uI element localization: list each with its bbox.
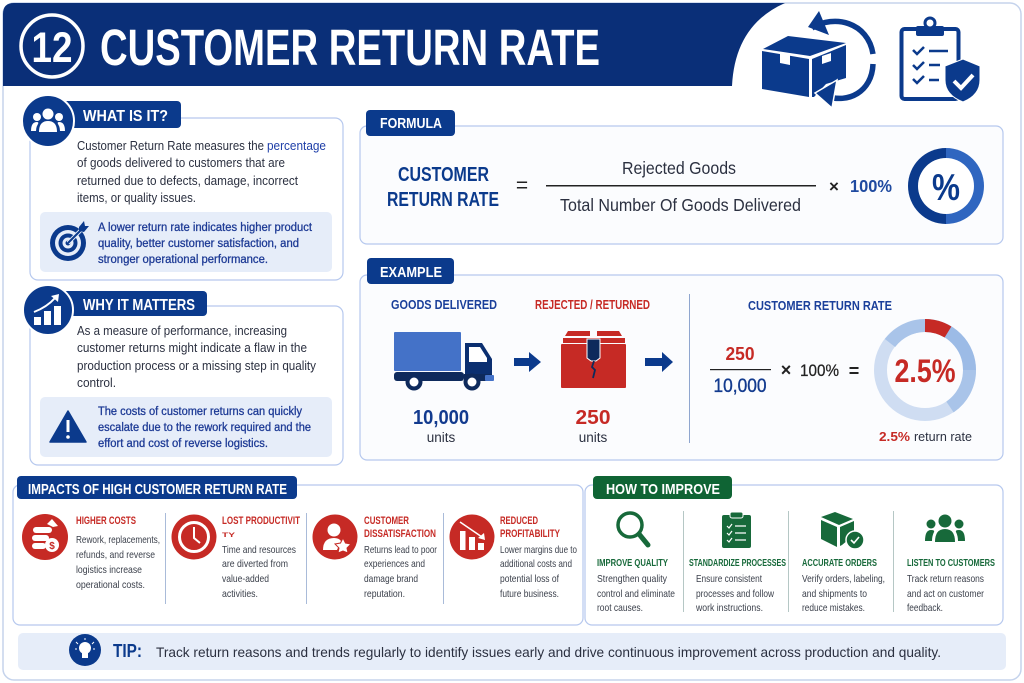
improve: accurate orders: and shipments to [802, 588, 867, 600]
icon: clock [172, 514, 216, 560]
impact: reduced profitability: Lower margins due to [500, 544, 577, 556]
improve: listen to customers: feedback. [907, 602, 943, 614]
impact: customer dissatisfaction: CUSTOMER [364, 515, 409, 527]
panel: formula: × [829, 177, 839, 196]
arrow [514, 352, 541, 372]
rejected returned: 250 [576, 407, 610, 429]
icon: box with check [821, 512, 864, 549]
icon: people [925, 514, 965, 542]
tip bar: Track return reasons and trends regularly to identify issues early and drive continuous improvement across production and quality. [156, 644, 941, 660]
rejected returned: REJECTED / RETURNED [535, 298, 650, 312]
heading: how to improve [593, 476, 732, 499]
title: CUSTOMER RETURN RATE [100, 19, 600, 76]
icon: box with return arrows [762, 11, 873, 108]
impact: customer dissatisfaction: reputation. [364, 588, 405, 600]
icon: warning [50, 411, 86, 442]
impact: higher costs: logistics increase [76, 564, 142, 576]
definition text: of goods delivered to customers that are [77, 155, 285, 170]
number badge [21, 15, 83, 77]
why it matters text [77, 323, 317, 390]
callout: costs of returns: escalate due to the rework required and the [98, 420, 311, 434]
improve: quality: IMPROVE QUALITY [597, 557, 668, 569]
return rate calculation: 10,000 [714, 376, 766, 397]
heading: why it matters [62, 291, 207, 316]
icon: target [50, 221, 89, 261]
formula fraction [546, 158, 816, 215]
panel: why it matters [23, 285, 343, 465]
panel: how to improve [585, 476, 1003, 625]
impact: lost productivity [172, 514, 300, 600]
icon: coins: $ [49, 541, 55, 552]
why it matters text: As a measure of performance, increasing [77, 323, 287, 338]
return rate calculation [710, 299, 892, 397]
improve: listen to customers: Track return reasons [907, 573, 984, 585]
return rate calculation: = [849, 361, 859, 381]
impact: reduced profitability: REDUCED [500, 515, 538, 527]
icon: falling bars [450, 514, 494, 560]
heading: what is it [62, 101, 181, 128]
heading: formula: FORMULA [380, 116, 442, 132]
tip bar [18, 633, 1006, 670]
impact: lost productivity: LOST PRODUCTIVIT [222, 515, 300, 527]
improve: standardize processes: processes and follow [696, 588, 774, 600]
why it matters text: production process or a missing step in quality [77, 358, 317, 373]
panel: example [360, 258, 1003, 460]
impact: higher costs: HIGHER COSTS [76, 515, 136, 527]
panel: impacts [13, 476, 583, 625]
impact: customer dissatisfaction: Returns lead to poor [364, 544, 437, 556]
icon: rising bars [23, 285, 73, 335]
goods delivered [391, 298, 497, 445]
impact: reduced profitability: PROFITABILITY [500, 528, 560, 540]
goods delivered: GOODS DELIVERED [391, 298, 497, 312]
callout: costs of returns: effort and cost of reverse logistics. [98, 436, 268, 450]
impact: lost productivity: activities. [222, 588, 258, 600]
impact: reduced profitability: potential loss of [500, 573, 559, 585]
heading: impacts [17, 476, 297, 499]
callout: costs of returns: The costs of customer returns can quickly [98, 404, 303, 418]
improve: standardize processes: STANDARDIZE PROCESSES [689, 557, 786, 569]
arrow [645, 352, 673, 372]
definition text [77, 138, 326, 205]
callout: lower return rate: A lower return rate indicates higher product [98, 220, 313, 234]
improve: accurate orders: reduce mistakes. [802, 602, 865, 614]
impact: lost productivity: value-added [222, 573, 269, 585]
heading: what is it: WHAT IS IT? [83, 108, 168, 125]
panel: formula: 100% [850, 176, 892, 196]
definition text: returned due to defects, damage, incorrect [77, 173, 298, 188]
impact: reduced profitability: future business. [500, 588, 559, 600]
icon: truck [394, 332, 494, 390]
heading: why it matters: WHY IT MATTERS [83, 297, 195, 314]
icon: magnifier [618, 513, 648, 545]
callout: lower return rate: quality, better customer satisfaction, and [98, 236, 299, 250]
impact: lost productivity: TY [222, 533, 235, 539]
improve: standardize processes: work instructions. [695, 602, 763, 614]
return rate calculation: 250 [726, 344, 754, 364]
donut chart: 2.5% [894, 353, 956, 389]
callout: costs of returns [40, 397, 332, 457]
rejected returned [535, 298, 650, 445]
impact: lost productivity: are diverted from [222, 558, 288, 570]
improve: accurate orders: Verify orders, labeling, [802, 573, 885, 585]
impact: higher costs: refunds, and reverse [76, 549, 155, 561]
improve: quality [597, 513, 675, 614]
icon: person with star [312, 514, 358, 560]
impact: higher costs: operational costs. [76, 579, 145, 591]
heading: impacts: IMPACTS OF HIGH CUSTOMER RETURN RATE [28, 481, 287, 498]
why it matters text: control. [77, 375, 116, 390]
formula label: CUSTOMER [398, 164, 489, 186]
icon: light bulb [69, 634, 101, 666]
donut caption: 2.5% [879, 429, 910, 444]
donut caption: return rate [914, 429, 972, 444]
impact: higher costs: Rework, replacements, [76, 534, 160, 546]
panel: what is it [22, 95, 343, 280]
impact: customer dissatisfaction [312, 514, 437, 600]
icon: people [22, 95, 74, 147]
goods delivered: units [427, 430, 456, 445]
why it matters text: customer returns might indicate a flaw in the [77, 340, 307, 355]
return rate calculation: CUSTOMER RETURN RATE [748, 299, 892, 313]
goods delivered: 10,000 [413, 407, 469, 429]
panel: formula [360, 110, 1003, 244]
formula label: RETURN RATE [387, 189, 499, 211]
definition text: percentage [267, 138, 326, 153]
impact: customer dissatisfaction: damage brand [364, 573, 418, 585]
improve: quality: root causes. [597, 602, 643, 614]
icon: percent ring [908, 148, 984, 224]
return rate calculation: × [781, 360, 791, 380]
number badge: 12 [32, 24, 72, 72]
heading: how to improve: HOW TO IMPROVE [606, 481, 720, 498]
definition text: Customer Return Rate measures the [77, 138, 264, 153]
donut chart [880, 326, 970, 414]
donut caption [879, 429, 972, 444]
impact: reduced profitability [450, 514, 577, 600]
icon: percent ring: % [932, 167, 960, 208]
improve: standardize processes: Ensure consistent [696, 573, 762, 585]
improve: quality: control and eliminate [597, 588, 675, 600]
improve: listen to customers: and act on customer [907, 588, 984, 600]
impact: higher costs [22, 514, 160, 591]
improve: accurate orders [802, 512, 885, 614]
improve: accurate orders: ACCURATE ORDERS [802, 557, 877, 569]
icon: damaged box [561, 331, 626, 388]
header banner [3, 3, 785, 86]
impact: customer dissatisfaction: experiences and [364, 558, 425, 570]
return rate calculation: 100% [800, 361, 839, 380]
definition text: items, or quality issues. [77, 190, 196, 205]
impact: reduced profitability: additional costs and [500, 558, 572, 570]
icon: clipboard with shield [902, 18, 980, 102]
tip bar: TIP: [113, 641, 142, 661]
impact: customer dissatisfaction: DISSATISFACTION [364, 528, 436, 540]
impact: lost productivity: Time and resources [222, 544, 296, 556]
icon: checklist [722, 512, 751, 548]
heading: example: EXAMPLE [380, 265, 442, 281]
heading: example [367, 258, 454, 284]
improve: standardize processes [689, 512, 786, 614]
formula fraction: Total Number Of Goods Delivered [560, 195, 801, 215]
improve: quality: Strengthen quality [597, 573, 668, 585]
formula label [387, 164, 499, 211]
improve: listen to customers [907, 514, 995, 614]
panel: formula: = [516, 174, 528, 197]
formula fraction: Rejected Goods [622, 158, 736, 178]
callout: lower return rate: stronger operational performance. [98, 252, 268, 266]
callout: lower return rate [40, 212, 332, 272]
rejected returned: units [579, 430, 608, 445]
heading: formula [366, 110, 455, 136]
